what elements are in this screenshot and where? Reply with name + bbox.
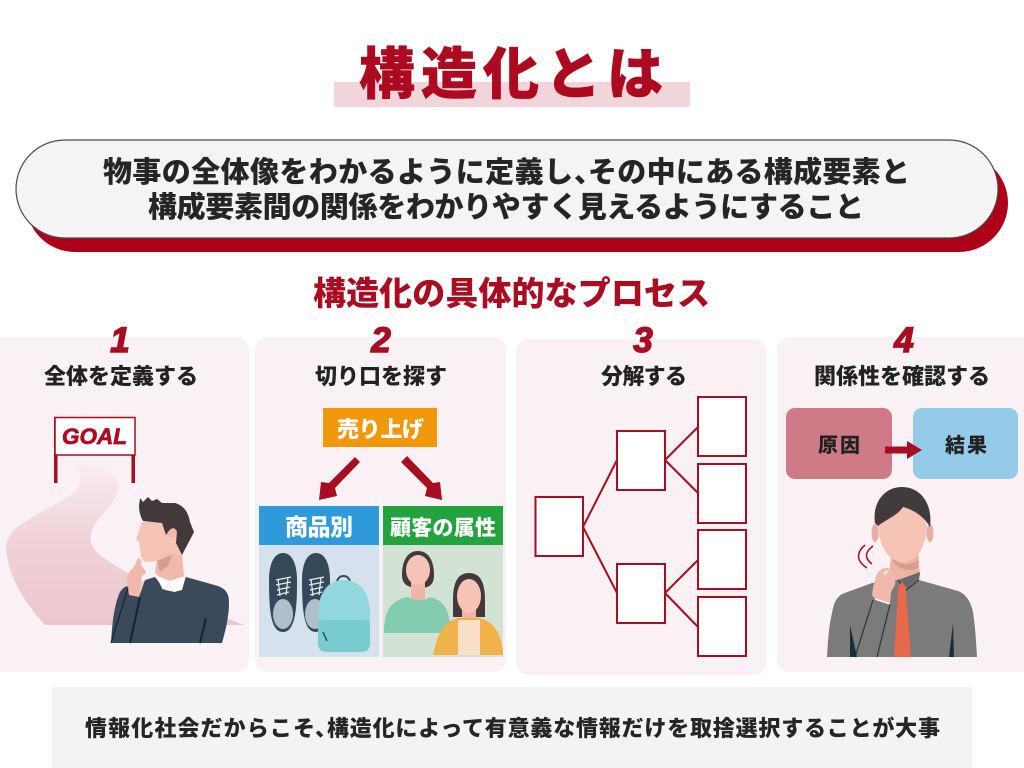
woman left bbox=[384, 551, 451, 633]
step 3 heading: 分解する bbox=[601, 364, 687, 389]
result box bbox=[913, 408, 1018, 479]
cause box: 原因 bbox=[818, 435, 860, 457]
speaking man bbox=[827, 487, 977, 657]
step number 3: 3 bbox=[633, 321, 653, 360]
step 2 heading: 切り口を探す bbox=[315, 364, 447, 389]
category: 商品別: 商品別 bbox=[285, 514, 353, 540]
result box: 結果 bbox=[945, 434, 987, 457]
orange box: 売り上げ: 売り上げ bbox=[337, 417, 424, 442]
step number 2: 2 bbox=[370, 321, 391, 360]
step number 1: 1 bbox=[110, 321, 130, 360]
category: 商品別 bbox=[259, 506, 379, 657]
panel: step 1 bbox=[0, 321, 249, 672]
bottom message bar: 構造化によって有意義な情報だけを取捨選択することが大事 bbox=[327, 716, 940, 741]
backpack bbox=[318, 576, 370, 652]
tree diagram bbox=[536, 397, 746, 656]
bottom message bar: 情報化社会だからこそ bbox=[85, 716, 315, 741]
cause box bbox=[786, 408, 892, 479]
step 4 heading: 関係性を確認する bbox=[814, 364, 990, 389]
orange box: 売り上げ bbox=[323, 408, 437, 447]
shoes bbox=[269, 553, 330, 632]
goal sign: GOAL bbox=[62, 424, 127, 449]
definition pill: 構成要素間の関係をわかりやすく見えるようにすること bbox=[148, 190, 864, 224]
definition pill bbox=[16, 140, 1008, 252]
title: 構造化とは bbox=[359, 43, 669, 106]
woman right bbox=[433, 573, 503, 655]
bottom message bar bbox=[52, 687, 972, 768]
step 1 heading: 全体を定義する bbox=[44, 364, 198, 389]
step number 4: 4 bbox=[893, 321, 914, 360]
panel: step 4 bbox=[777, 321, 1024, 672]
arrow bbox=[885, 441, 922, 459]
goal sign bbox=[54, 417, 135, 483]
thinking man bbox=[111, 497, 229, 643]
category: 顧客の属性: 顧客の属性 bbox=[390, 517, 496, 540]
category: 顧客の属性 bbox=[383, 506, 503, 657]
road bbox=[6, 464, 245, 625]
process heading: 構造化の具体的なプロセス bbox=[313, 275, 710, 312]
panel: step 3 bbox=[516, 321, 767, 675]
definition pill: 物事の全体像をわかるように定義し bbox=[103, 156, 573, 189]
arrow right bbox=[401, 456, 442, 500]
panel: step 2 bbox=[255, 321, 506, 672]
bottom message bar: 、 bbox=[315, 716, 337, 741]
arrow left bbox=[319, 457, 360, 500]
definition pill: その中にある構成要素と bbox=[588, 155, 910, 189]
definition pill: 、 bbox=[574, 157, 603, 189]
